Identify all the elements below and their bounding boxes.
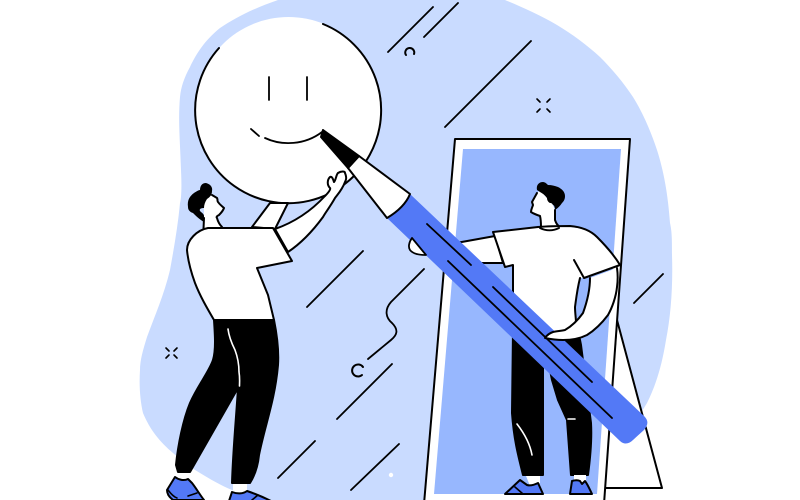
right person <box>445 182 620 494</box>
mirror stand <box>604 320 662 488</box>
small ring marks <box>352 48 414 376</box>
background diagonal lines <box>278 3 663 490</box>
left shoes <box>167 477 204 500</box>
mirror glass <box>434 149 621 494</box>
shirt <box>493 227 620 345</box>
left socks <box>178 473 247 493</box>
mirror hand <box>409 238 426 255</box>
hair <box>537 182 565 210</box>
tucked arm <box>545 268 618 340</box>
pencil tip <box>321 130 359 168</box>
pants highlight <box>228 329 240 386</box>
white dot <box>389 473 393 477</box>
pencil body <box>387 194 647 444</box>
hair <box>188 183 212 222</box>
pencil wood <box>348 156 410 218</box>
pants highlights <box>517 419 575 455</box>
neck and face <box>203 195 224 228</box>
collar <box>540 228 559 230</box>
shirt <box>187 228 292 320</box>
pencil lines <box>427 224 612 418</box>
right socks <box>526 475 586 486</box>
sparkle left <box>166 348 177 358</box>
smiley face <box>195 17 382 203</box>
background blob <box>140 0 672 500</box>
pants <box>512 330 591 475</box>
sparkle top right <box>537 99 550 112</box>
mirror arm <box>445 236 503 263</box>
raised near arm <box>275 172 346 252</box>
raised far arm <box>252 203 288 229</box>
left person <box>167 172 346 500</box>
pencil <box>321 130 647 444</box>
right shoes <box>505 480 543 494</box>
mirror frame <box>424 139 630 500</box>
neck and face <box>531 190 560 228</box>
pants <box>176 320 278 483</box>
